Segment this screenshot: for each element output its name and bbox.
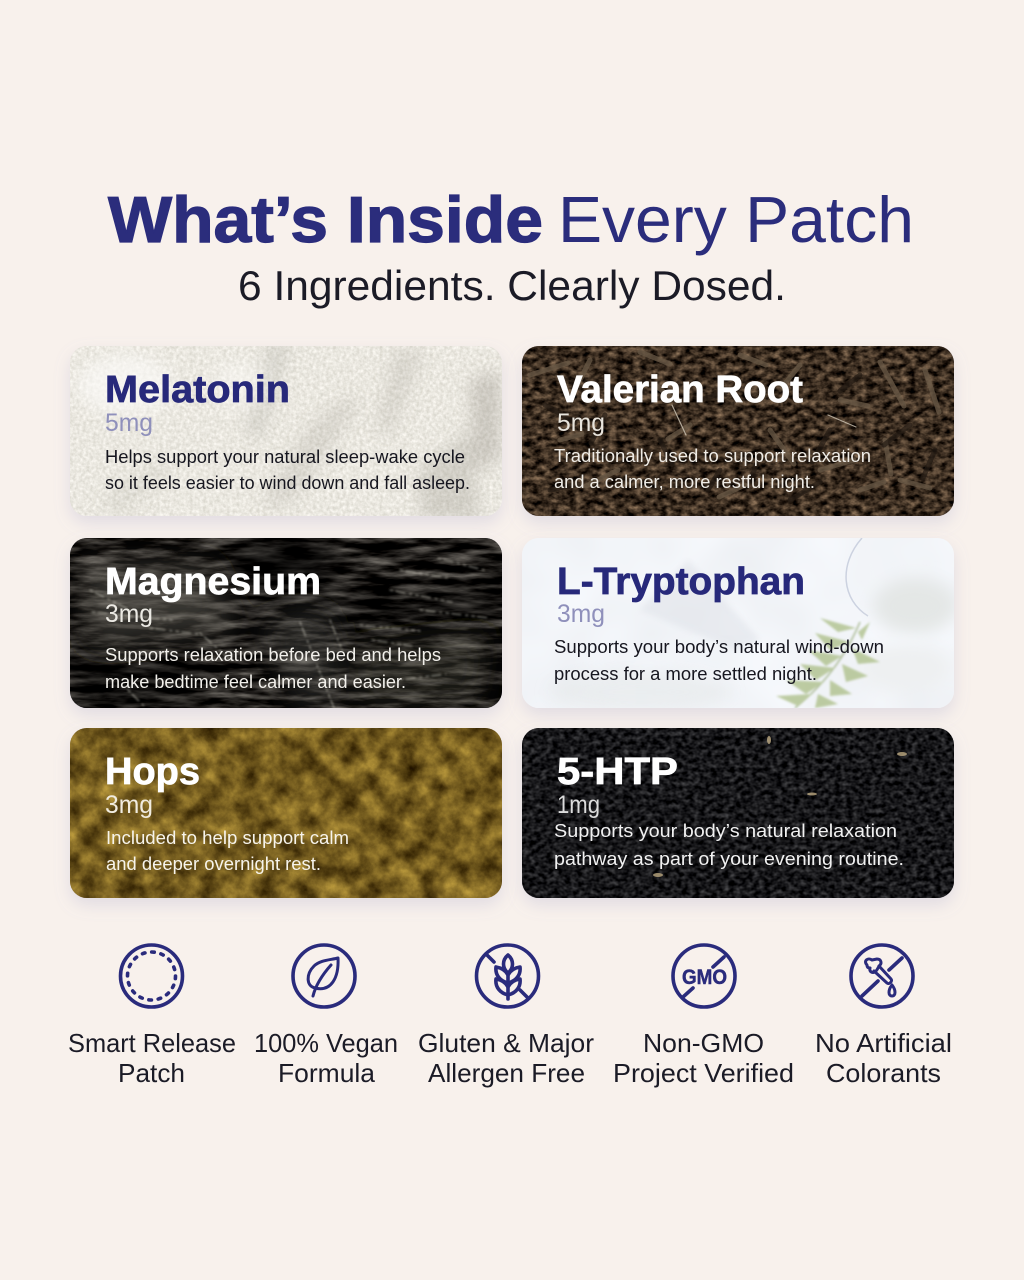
magnesium text: Supports relaxation before bed and helps (105, 644, 441, 665)
icon: non-gmo (673, 945, 735, 1007)
label: no artificial colorants (815, 1028, 952, 1088)
panel: melatonin (70, 340, 502, 520)
label: non-gmo: Non-GMO (643, 1028, 764, 1058)
l-tryptophan text: process for a more settled night. (554, 663, 817, 684)
melatonin text: so it feels easier to wind down and fall asleep. (105, 472, 470, 493)
5-htp text: 5-HTP (557, 751, 678, 793)
valerian text: Valerian Root (557, 369, 803, 411)
label: vegan: 100% Vegan (254, 1028, 398, 1058)
melatonin text: Melatonin (105, 369, 290, 411)
5-htp text (554, 751, 904, 869)
magnesium text (105, 561, 441, 692)
melatonin text: 5mg (105, 409, 153, 437)
label: smart release patch (68, 1028, 236, 1088)
label: vegan (254, 1028, 398, 1088)
fern (776, 618, 880, 708)
l-tryptophan text: L-Tryptophan (557, 561, 805, 603)
panel: 5-htp (522, 728, 954, 898)
label: smart release patch: Patch (118, 1058, 185, 1088)
5-htp text: pathway as part of your evening routine. (554, 848, 904, 869)
panel: l-tryptophan (522, 538, 957, 712)
valerian text (554, 369, 871, 492)
label: vegan: Formula (278, 1058, 376, 1088)
bowl and powder (845, 538, 954, 672)
icon: smart release patch (120, 945, 182, 1007)
melatonin text (105, 369, 470, 493)
panel: magnesium (70, 538, 502, 710)
l-tryptophan text: 3mg (557, 600, 605, 628)
5-htp text: 1mg (557, 791, 600, 819)
panel: hops (70, 728, 502, 898)
hops text: Hops (105, 751, 200, 793)
icon: non-gmo: GMO (682, 966, 727, 989)
label: gluten free: Gluten & Major (418, 1028, 594, 1058)
icon: gluten free wheat (476, 945, 538, 1007)
icon: no artificial colorants dropper (851, 945, 913, 1007)
valerian text: Traditionally used to support relaxation (554, 445, 871, 466)
subtitle: 6 Ingredients. Clearly Dosed. (238, 262, 786, 309)
label: gluten free (418, 1028, 594, 1088)
hops text: Included to help support calm (106, 827, 349, 848)
valerian text: and a calmer, more restful night. (554, 471, 815, 492)
title: Every Patch (558, 183, 914, 256)
label: smart release patch: Smart Release (68, 1028, 236, 1058)
hops text (105, 751, 349, 874)
title (108, 183, 914, 256)
panel: valerian root (522, 346, 954, 516)
5-htp text: Supports your body’s natural relaxation (554, 820, 897, 841)
hops text: and deeper overnight rest. (106, 853, 321, 874)
magnesium text: make bedtime feel calmer and easier. (105, 671, 406, 692)
label: gluten free: Allergen Free (428, 1058, 585, 1088)
title: What’s Inside (108, 183, 543, 256)
label: no artificial colorants: No Artificial (815, 1028, 952, 1058)
melatonin text: Helps support your natural sleep-wake cycle (105, 446, 465, 467)
label: no artificial colorants: Colorants (826, 1058, 941, 1088)
magnesium text: Magnesium (105, 561, 321, 603)
label: non-gmo (613, 1028, 794, 1088)
valerian text: 5mg (557, 409, 605, 437)
hops text: 3mg (105, 791, 153, 819)
label: non-gmo: Project Verified (613, 1058, 794, 1088)
l-tryptophan text: Supports your body’s natural wind-down (554, 636, 884, 657)
icon: vegan leaf (293, 945, 355, 1007)
magnesium text: 3mg (105, 600, 153, 628)
l-tryptophan text (554, 561, 884, 684)
